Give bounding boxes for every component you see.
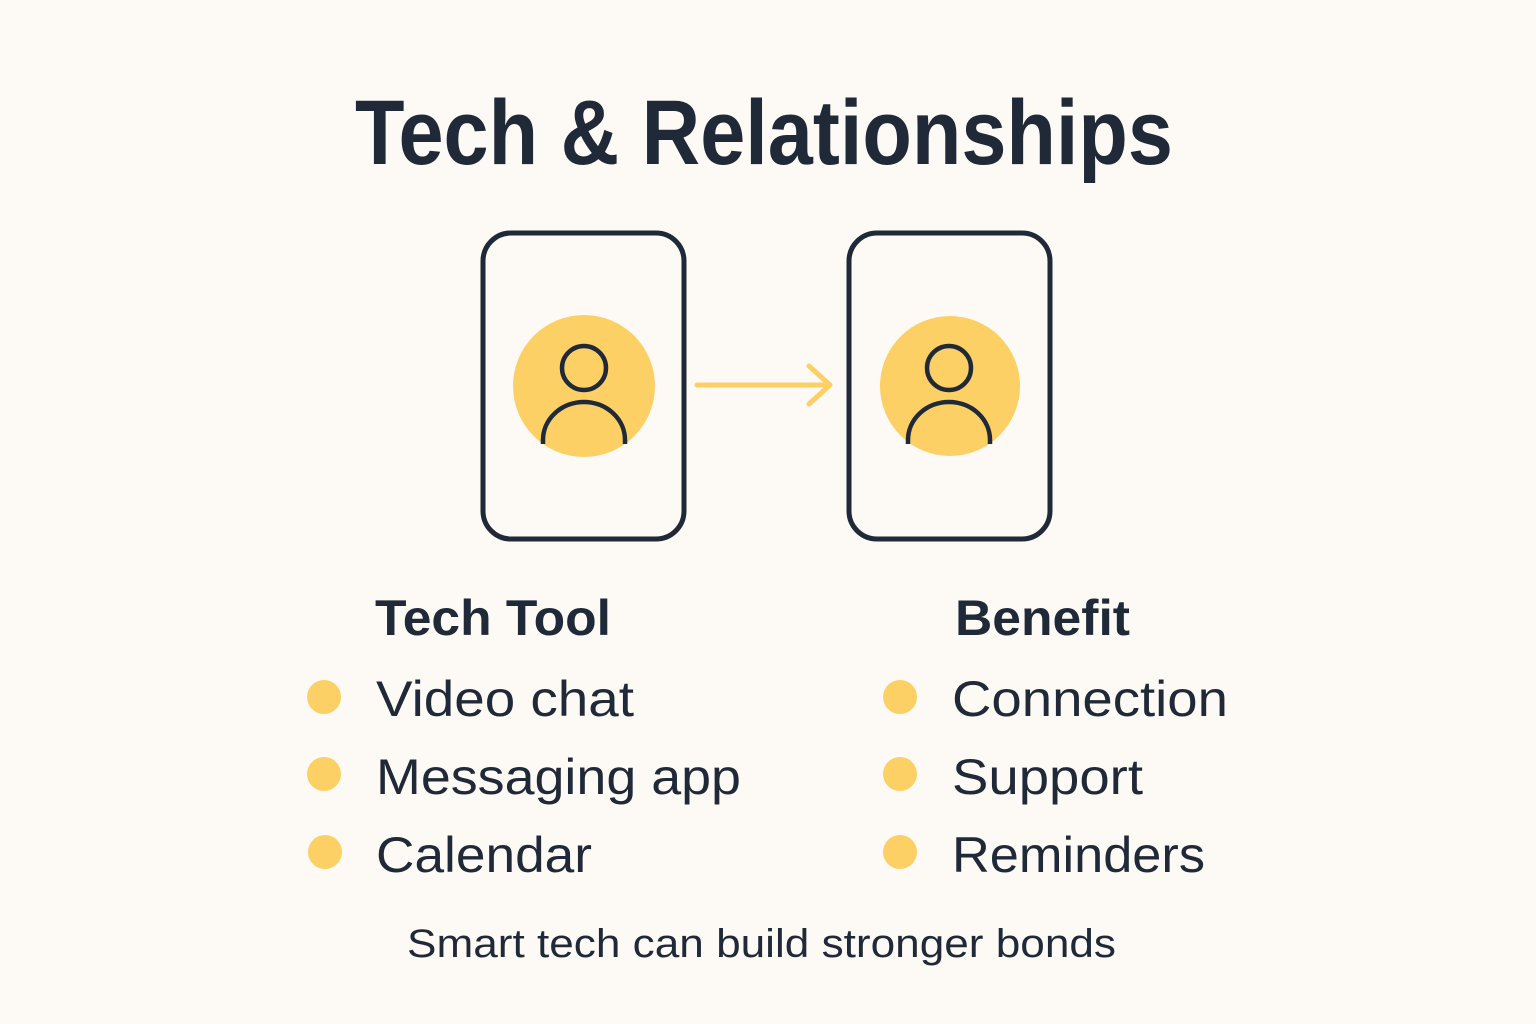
list: tech tools: Messaging app [376,749,741,805]
arrow [697,366,830,404]
title: Tech & Relationships [355,82,1173,184]
list: tech tools: Video chat [376,671,634,727]
list: benefits [883,671,1228,883]
footer text: Smart tech can build stronger bonds [407,922,1116,966]
list: benefits: Support [952,749,1143,805]
heading: Tech Tool: Tech Tool [375,590,611,646]
list: tech tools [307,671,741,883]
list: benefits: Reminders [952,827,1205,883]
list: tech tools: Calendar [376,827,592,883]
icon: right phone with person [849,233,1050,539]
heading: Benefit: Benefit [955,590,1130,646]
icon: left phone with person [483,233,684,539]
list: benefits: Connection [952,671,1228,727]
